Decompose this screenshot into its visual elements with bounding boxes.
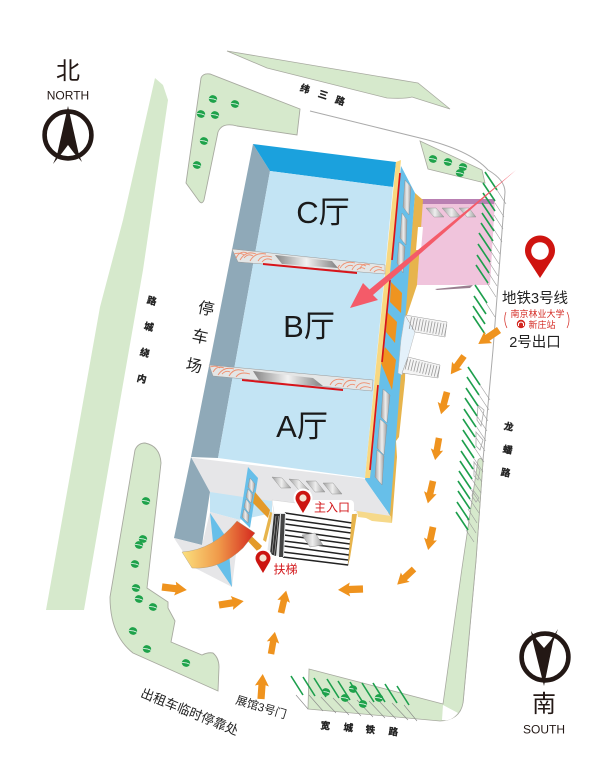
road label: east: 路 <box>500 466 512 480</box>
parking label: 车 <box>190 327 210 348</box>
red direction arrow from metro to hall B <box>350 170 516 308</box>
metro label: 地铁3号线 <box>502 290 568 307</box>
hall C label: C厅 <box>296 195 350 230</box>
metro label: 南京林业大学 <box>510 308 565 319</box>
road label: east: 蟠 <box>502 443 514 457</box>
north label and compass <box>45 58 91 164</box>
gate 3 label: 展馆3号门 <box>234 693 288 722</box>
pin: main entrance <box>294 488 354 515</box>
hall A label: A厅 <box>276 409 328 444</box>
green area: south-east strip <box>291 458 483 721</box>
left grey wall <box>174 144 270 545</box>
pink building <box>417 199 495 290</box>
metro label: 新庄站 <box>528 319 556 330</box>
exhibition halls floor <box>218 171 393 478</box>
road label: north: 路 <box>334 94 347 108</box>
south label and compass <box>522 629 568 736</box>
green area: north-west park <box>186 74 300 203</box>
south label and compass: SOUTH <box>523 722 565 736</box>
east green hatching <box>456 172 506 542</box>
road label: south: 铁 <box>365 724 376 737</box>
side wall orange panels <box>381 282 402 390</box>
front canopy <box>191 457 392 523</box>
road label: west: 内 <box>136 372 148 386</box>
road label: west: 路 <box>146 294 158 308</box>
lower entrance block <box>174 467 273 587</box>
road label: west <box>136 294 158 386</box>
hall B label: B厅 <box>283 309 335 344</box>
red side stripes <box>370 173 400 470</box>
green strip: west road <box>46 78 168 610</box>
orange walking route arrows <box>161 324 503 699</box>
north label and compass: 北 <box>56 58 80 85</box>
north label and compass: NORTH <box>47 88 89 102</box>
white notch in gold wall <box>416 227 423 250</box>
road label: south: 路 <box>388 726 399 739</box>
blue side wall <box>365 166 415 515</box>
pin: escalator: 扶梯 <box>273 562 298 576</box>
road boundary line <box>310 111 505 703</box>
taxi stop label: 出租车临时停靠处 <box>139 685 241 738</box>
road label: north: 纬 <box>299 82 312 96</box>
road label: south: 宽 <box>320 720 331 733</box>
road label: east <box>500 420 515 480</box>
pin: metro exit <box>525 236 555 278</box>
curved entry arrow <box>182 521 255 568</box>
hall C roof edge <box>253 144 396 187</box>
pin: main entrance: 主入口 <box>314 500 350 514</box>
road label: south <box>320 720 399 739</box>
road label: south: 城 <box>343 722 354 735</box>
parking label <box>184 299 216 377</box>
green area: north-east park <box>420 141 485 183</box>
pin: escalator <box>254 548 298 576</box>
green area: south-west park <box>110 443 219 691</box>
green area: north strip <box>227 51 450 109</box>
divider between B and A halls <box>209 365 373 391</box>
road label: north <box>299 82 347 108</box>
metro label: 2号出口 <box>509 334 561 351</box>
road label: west: 绕 <box>139 346 151 360</box>
road label: west: 城 <box>143 320 155 334</box>
south label and compass: 南 <box>532 691 556 718</box>
divider between C and B halls <box>232 249 385 274</box>
exterior staircases <box>398 315 447 378</box>
parking label: 停 <box>196 299 216 320</box>
side wall windows <box>375 180 411 485</box>
road label: north: 三 <box>317 89 329 102</box>
main staircase and escalator <box>267 513 357 565</box>
gold outer wall <box>388 193 423 523</box>
metro label <box>502 290 569 351</box>
road label: east: 龙 <box>503 420 515 434</box>
parking label: 场 <box>184 356 204 377</box>
cream edge strip <box>365 160 401 478</box>
